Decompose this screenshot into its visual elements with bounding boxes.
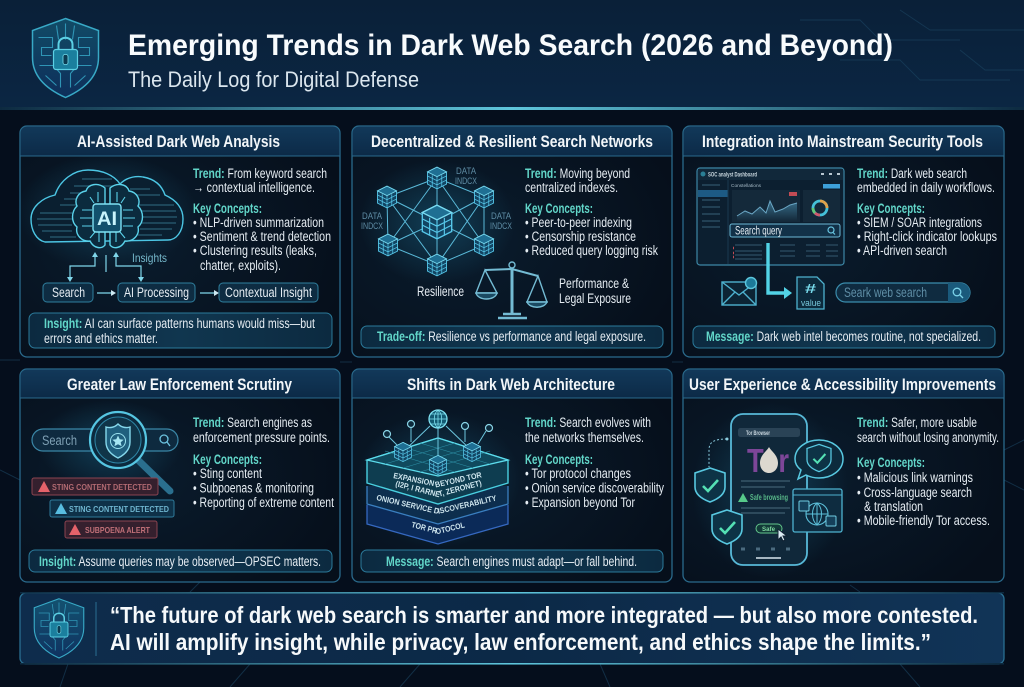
footer quote banner (20, 592, 1004, 664)
trend and key concepts: the networks themselves. (525, 430, 644, 445)
trend and key concepts (525, 166, 658, 258)
flow step: search: Search (52, 285, 85, 300)
insight callout: Insight: Assume queries may be observed—OPSEC matters. (39, 554, 321, 569)
footer shield (34, 599, 84, 658)
trend and key concepts: enforcement pressure points. (193, 430, 330, 445)
label: performance and legal exposure: Legal Exposure (559, 291, 631, 306)
trend and key concepts: chatter, exploits). (200, 258, 281, 273)
trend and key concepts: Key Concepts: (193, 201, 262, 216)
trend and key concepts: Key Concepts: (525, 452, 593, 467)
trend and key concepts: • Expansion beyond Tor (525, 495, 635, 510)
arrow: query to value (768, 243, 792, 299)
title: Emerging Trends in Dark Web Search (2026 and Beyond) (128, 29, 893, 62)
icon: value document: # (805, 281, 817, 296)
heading: Greater Law Enforcement Scrutiny (67, 375, 292, 394)
trend and key concepts (525, 415, 664, 510)
search pill: Seark web search (844, 285, 927, 300)
label: performance and legal exposure: Performance & (559, 276, 629, 291)
trend and key concepts: • Tor protocol changes (525, 466, 631, 481)
icon: envelope (722, 278, 756, 305)
trend and key concepts: Trend: From keyword search (193, 166, 327, 181)
trend and key concepts: • Clustering results (leaks, (193, 243, 317, 258)
panel: integration into mainstream tools (683, 126, 1004, 357)
heading: AI-Assisted Dark Web Analysis (77, 132, 280, 151)
panel: law enforcement scrutiny (20, 369, 340, 582)
layer label: expansion beyond Tor: EXPANSION BEYOND TOR (394, 472, 482, 488)
insight callout (29, 313, 332, 348)
alert: sting content red (32, 478, 158, 495)
flow step: AI processing (118, 283, 195, 302)
labels: data index: DATA (362, 211, 382, 221)
trend and key concepts: → contextual intelligence. (193, 180, 315, 195)
layer label: Tor protocol: TOR PROTOCOL (412, 522, 465, 534)
labels: data index: INDCX (361, 221, 383, 231)
label: insights: Insights (132, 251, 167, 265)
label: performance and legal exposure (559, 276, 631, 306)
trend and key concepts: • Subpoenas & monitoring (193, 480, 314, 496)
layer label: onion service discoverability: ONION SERVICE DISCOVERABILITY (376, 495, 496, 514)
Tor logo: Tor (747, 442, 789, 479)
message callout (693, 326, 995, 348)
search query bar (730, 224, 840, 238)
trend and key concepts: • Mobile-friendly Tor access. (857, 513, 990, 528)
labels: data index (361, 166, 512, 231)
icon: shield lower (712, 510, 742, 544)
alert: sting content blue (50, 500, 174, 517)
labels: data index: INDCX (455, 176, 477, 186)
trend and key concepts (857, 415, 999, 528)
trend and key concepts: • Sentiment & trend detection (193, 229, 331, 244)
trend and key concepts: Key Concepts: (193, 452, 262, 467)
header shield logo (32, 18, 98, 98)
flow step: contextual insight: Contextual Insight (225, 285, 312, 300)
trend and key concepts: • Reporting of extreme content (193, 495, 334, 510)
trend and key concepts: Trend: Search engines as (193, 415, 312, 430)
safe button with cursor: Safe (762, 527, 776, 533)
heading: Shifts in Dark Web Architecture (407, 375, 615, 394)
panel: shifts in architecture (351, 368, 673, 583)
illustration: SOC dashboard: SOC analyst Dashboard (708, 172, 757, 178)
trend and key concepts: • Malicious link warnings (857, 470, 973, 485)
quote text: AI will amplify insight, while privacy, law enforcement, and ethics shape the limits.” (110, 629, 931, 655)
insight callout: Insight: AI can surface patterns humans would miss—but (44, 316, 315, 331)
icon: shield speech bubble (795, 440, 843, 479)
trend and key concepts: Trend: Moving beyond (525, 166, 630, 181)
trend and key concepts: • Sting content (193, 466, 262, 481)
flow step: AI processing: AI Processing (124, 285, 189, 300)
safe button with cursor (756, 524, 787, 541)
connector arrows (67, 252, 219, 296)
insight callout (29, 550, 332, 572)
layer label: expansion beyond Tor: (I2P, I RARNET, ZERONET) (396, 480, 482, 498)
flow step: contextual insight (219, 283, 318, 302)
illustration: AI cloud brain: AI (97, 209, 117, 230)
icon: balance scales (476, 262, 547, 318)
icon: translation browser window (793, 489, 842, 532)
trade-off callout (361, 326, 663, 348)
alert: sting content red: STING CONTENT DETECTED (52, 482, 152, 492)
icon: shield left (695, 468, 725, 502)
panel: decentralized search networks (352, 126, 672, 357)
subtitle: The Daily Log for Digital Defense (128, 67, 419, 92)
labels: data index: DATA (456, 166, 476, 176)
message callout: Message: Search engines must adapt—or fall behind. (386, 554, 637, 569)
trend and key concepts: centralized indexes. (525, 180, 618, 195)
illustration: AI cloud brain (17, 154, 197, 270)
icon: value document (797, 277, 824, 309)
trend and key concepts (193, 415, 334, 510)
illustration: phone with Tor browser: Tor Browser (746, 431, 770, 437)
trend and key concepts: & translation (864, 499, 923, 514)
labels: data index: DATA (491, 211, 511, 221)
trend and key concepts: Trend: Safer, more usable (857, 415, 977, 430)
icon: value document: value (801, 298, 821, 308)
illustration: SOC dashboard (697, 168, 844, 265)
trend and key concepts: Key Concepts: (857, 455, 925, 470)
header glow rule (0, 107, 1024, 110)
alert: sting content blue: STING CONTENT DETECTED (69, 504, 169, 514)
layer label: expansion beyond Tor (394, 472, 482, 498)
trade-off callout: Trade-off: Resilience vs performance and legal exposure. (377, 329, 646, 344)
trend and key concepts: • API-driven search (857, 243, 947, 258)
insight callout: errors and ethics matter. (44, 331, 158, 346)
labels: data index: INDCX (490, 221, 512, 231)
trend and key concepts: • NLP-driven summarization (193, 215, 324, 230)
trend and key concepts: Key Concepts: (525, 201, 593, 216)
trend and key concepts: • Peer-to-peer indexing (525, 215, 632, 230)
message callout (361, 550, 663, 572)
trend and key concepts (193, 166, 331, 273)
trend and key concepts (857, 166, 997, 258)
panel: user experience (683, 369, 1004, 582)
trend and key concepts: • Onion service discoverability (525, 480, 664, 496)
alert: subpoena: SUBPOENA ALERT (85, 525, 151, 535)
icon: magnifier with badge (90, 412, 170, 491)
trend and key concepts: • SIEM / SOAR integrations (857, 215, 982, 230)
search pill (836, 283, 970, 302)
illustration: peer-to-peer network (359, 160, 515, 284)
quote text (110, 602, 978, 655)
trend and key concepts: • Reduced query logging risk (525, 243, 658, 258)
trend and key concepts: • Cross-language search (857, 485, 972, 500)
trend and key concepts: Trend: Search evolves with (525, 415, 651, 430)
safe browsing status (738, 493, 788, 502)
trend and key concepts: • Censorship resistance (525, 229, 636, 244)
heading: Decentralized & Resilient Search Networks (371, 132, 653, 151)
search pill: Search (42, 433, 77, 448)
illustration: layered network stack (356, 410, 520, 548)
safe browsing status: Safe browsing (750, 493, 788, 502)
illustration: SOC dashboard: Constellations (731, 183, 762, 188)
panel: AI-assisted dark web analysis (17, 126, 340, 357)
alert: subpoena (65, 521, 157, 538)
search query bar: Search query (735, 226, 782, 238)
illustration: phone with Tor browser (692, 402, 848, 578)
label: resilience: Resilience (417, 284, 464, 299)
flow step: search (43, 283, 93, 302)
trend and key concepts: Key Concepts: (857, 201, 925, 216)
trend and key concepts: Trend: Dark web search (857, 166, 967, 181)
search pill (32, 400, 182, 490)
